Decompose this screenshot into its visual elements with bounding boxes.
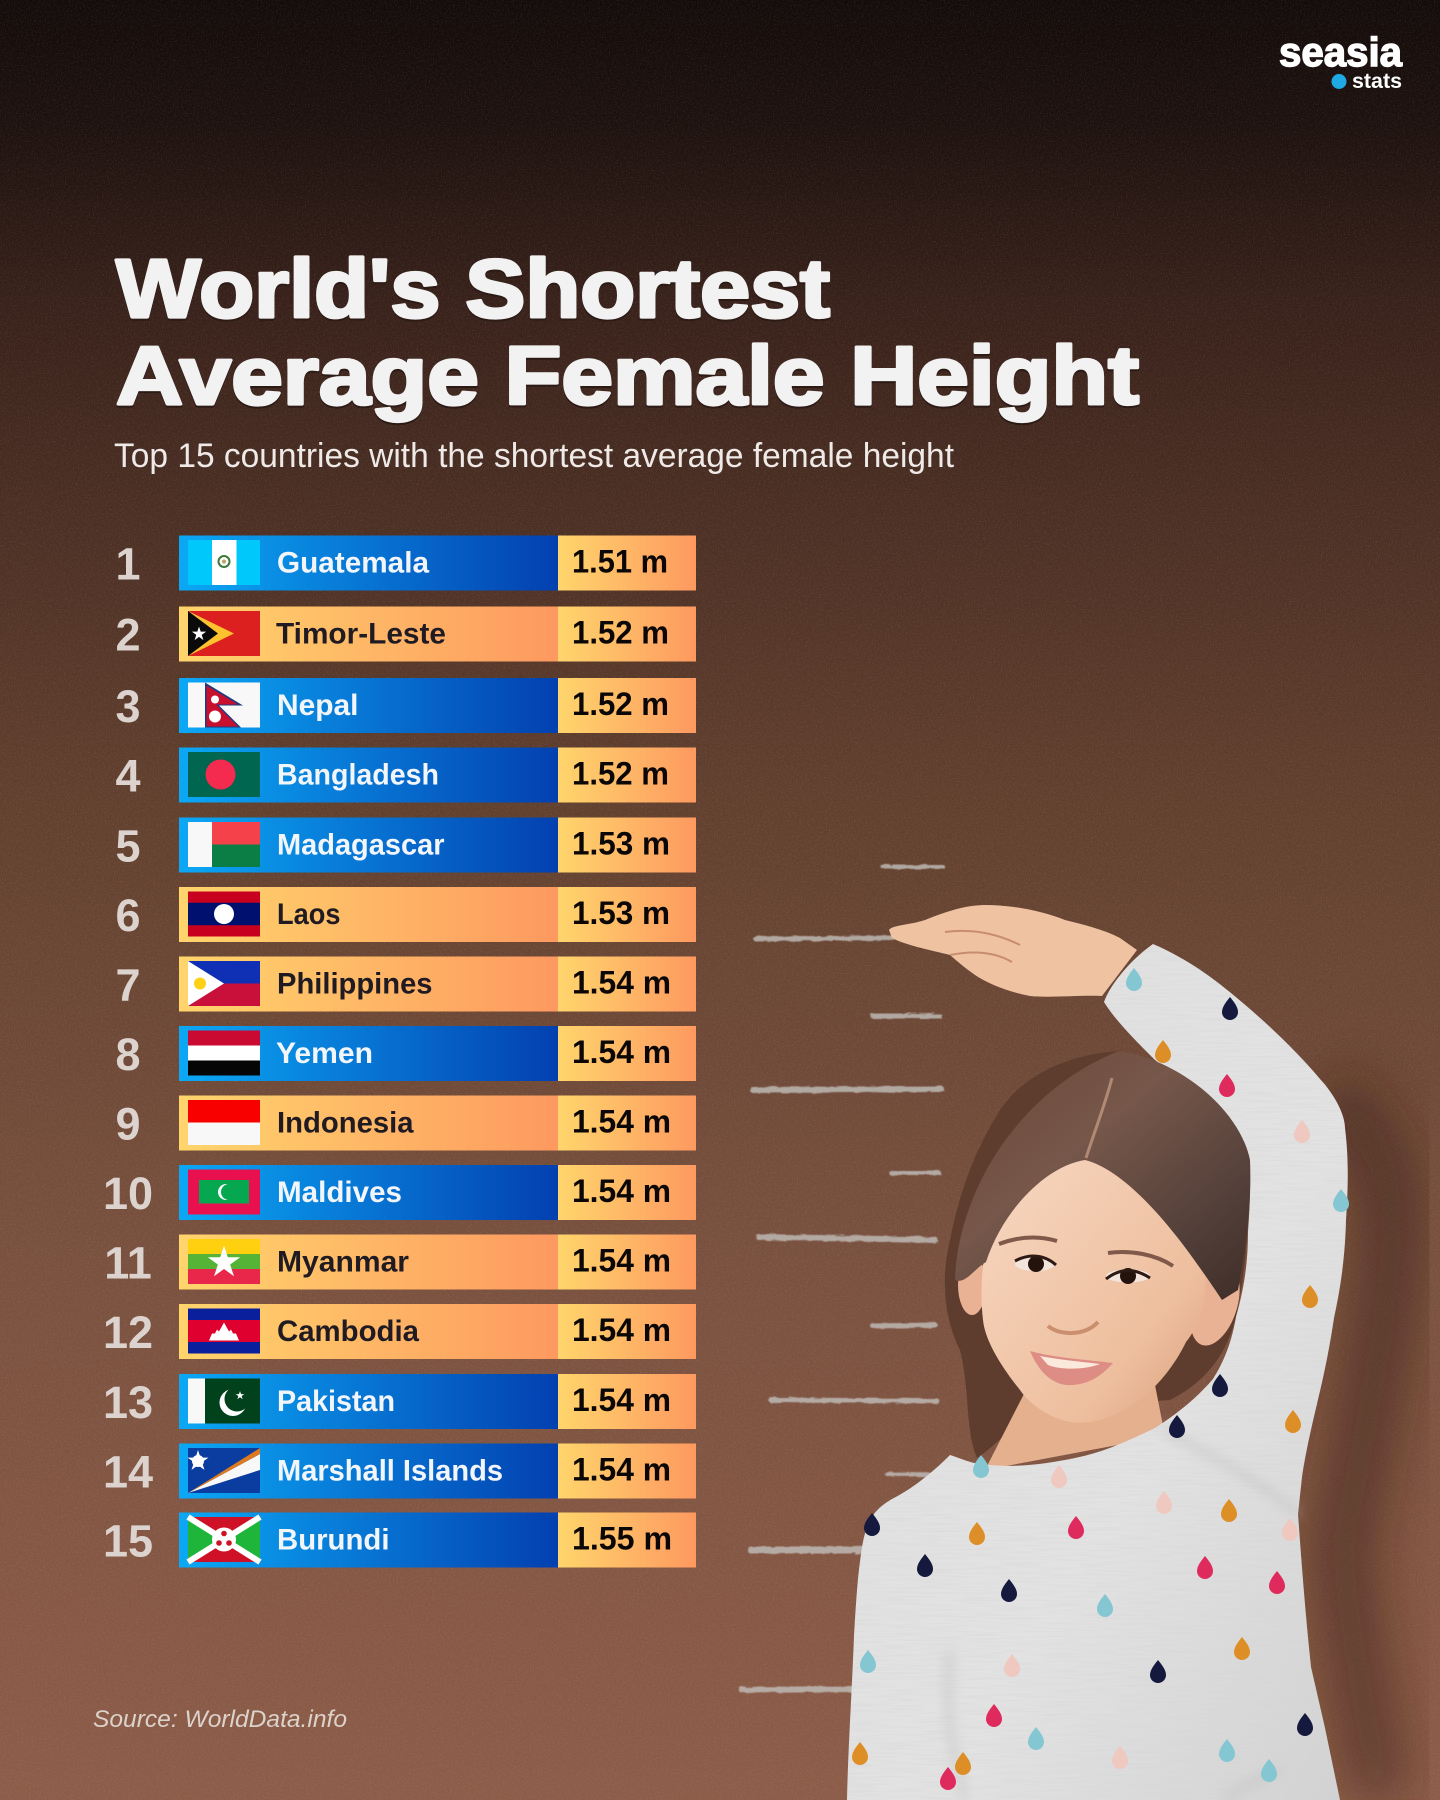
logo: seasia stats: seasia: [1279, 29, 1403, 75]
row 14 Marshall Islands: Marshall Islands: [277, 1454, 503, 1488]
row 14 Marshall Islands: 14: [103, 1446, 153, 1498]
logo: seasia stats: stats: [1352, 70, 1402, 93]
source note: Source: WorldData.info: [93, 1706, 347, 1733]
row 8 Yemen: 8: [115, 1029, 141, 1080]
row 15 Burundi: Burundi: [277, 1524, 390, 1556]
row 12 Cambodia: [103, 1304, 696, 1359]
row 3 Nepal: Nepal: [277, 689, 358, 722]
chalk height marks: [742, 867, 943, 1690]
row 12 Cambodia: 1.54 m: [572, 1312, 671, 1348]
neck: [985, 1385, 1165, 1470]
row 1 Guatemala: 1.51 m: [572, 544, 668, 580]
row 3 Nepal: [115, 678, 696, 733]
row 11 Myanmar: [104, 1234, 696, 1290]
row 13 Pakistan: 13: [103, 1377, 153, 1428]
row 4 Bangladesh: 4: [115, 750, 141, 802]
sweater droplets: [852, 968, 1349, 1790]
eyes and brows: [999, 1238, 1173, 1284]
row 15 Burundi: 1.55 m: [572, 1520, 672, 1556]
row 12 Cambodia: 12: [103, 1307, 153, 1358]
row 10 Maldives: [103, 1165, 696, 1220]
ranking list: [103, 536, 696, 1568]
row 10 Maldives: 10: [103, 1168, 153, 1219]
row 6 Laos: Laos: [277, 898, 340, 931]
row 4 Bangladesh: Bangladesh: [277, 758, 439, 792]
row 5 Madagascar: [115, 818, 696, 872]
row 7 Philippines: [115, 956, 696, 1012]
girl illustration: [847, 905, 1349, 1800]
row 4 Bangladesh: 1.52 m: [572, 756, 669, 792]
face: [982, 1146, 1206, 1423]
row 3 Nepal: 3: [115, 681, 141, 732]
title: [116, 242, 1139, 422]
title: World's Shortest: [116, 242, 830, 335]
row 6 Laos: [115, 887, 696, 942]
row 7 Philippines: 1.54 m: [572, 964, 671, 1000]
finger lines: [945, 931, 1020, 962]
ears: [958, 1255, 1249, 1352]
row 11 Myanmar: Myanmar: [277, 1246, 409, 1278]
row 5 Madagascar: 1.53 m: [572, 826, 670, 862]
row 1 Guatemala: Guatemala: [277, 546, 429, 580]
row 8 Yemen: Yemen: [276, 1037, 373, 1070]
sweater: [847, 944, 1348, 1800]
row 12 Cambodia: Cambodia: [277, 1315, 419, 1348]
row 2 Timor-Leste: Timor-Leste: [276, 618, 446, 650]
row 10 Maldives: Maldives: [277, 1176, 402, 1209]
row 5 Madagascar: 5: [115, 820, 141, 872]
row 3 Nepal: 1.52 m: [572, 686, 669, 722]
row 13 Pakistan: Pakistan: [277, 1385, 395, 1418]
title: Average Female Height: [116, 329, 1139, 422]
row 13 Pakistan: [103, 1374, 696, 1429]
row 4 Bangladesh: [115, 748, 696, 802]
row 7 Philippines: Philippines: [277, 968, 432, 1000]
row 9 Indonesia: [115, 1096, 696, 1150]
row 2 Timor-Leste: 1.52 m: [572, 614, 669, 650]
row 6 Laos: 1.53 m: [572, 895, 670, 931]
row 2 Timor-Leste: [115, 606, 696, 662]
subtitle: Top 15 countries with the shortest average female height: [114, 437, 955, 475]
hair back: [945, 1051, 1250, 1458]
sweater fold shadows: [948, 1428, 1298, 1800]
row 9 Indonesia: 9: [115, 1098, 141, 1150]
row 11 Myanmar: 11: [104, 1238, 152, 1288]
row 1 Guatemala: 1: [115, 538, 141, 590]
hair parting: [1086, 1078, 1112, 1158]
row 8 Yemen: 1.54 m: [572, 1034, 671, 1070]
row 14 Marshall Islands: 1.54 m: [572, 1452, 671, 1488]
row 9 Indonesia: 1.54 m: [572, 1104, 671, 1140]
nose: [1048, 1322, 1098, 1333]
row 6 Laos: 6: [115, 890, 141, 941]
row 7 Philippines: 7: [115, 960, 141, 1010]
hair top: [955, 1051, 1250, 1300]
hand: [889, 905, 1137, 997]
row 10 Maldives: 1.54 m: [572, 1173, 671, 1209]
row 13 Pakistan: 1.54 m: [572, 1382, 671, 1418]
row 11 Myanmar: 1.54 m: [572, 1242, 671, 1278]
row 8 Yemen: [115, 1026, 696, 1081]
row 15 Burundi: [103, 1512, 696, 1568]
mouth: [1030, 1351, 1113, 1385]
row 14 Marshall Islands: [103, 1444, 696, 1498]
row 5 Madagascar: Madagascar: [277, 828, 445, 862]
row 9 Indonesia: Indonesia: [277, 1106, 414, 1140]
row 15 Burundi: 15: [103, 1516, 153, 1566]
row 1 Guatemala: [115, 536, 696, 590]
row 2 Timor-Leste: 2: [115, 610, 141, 660]
